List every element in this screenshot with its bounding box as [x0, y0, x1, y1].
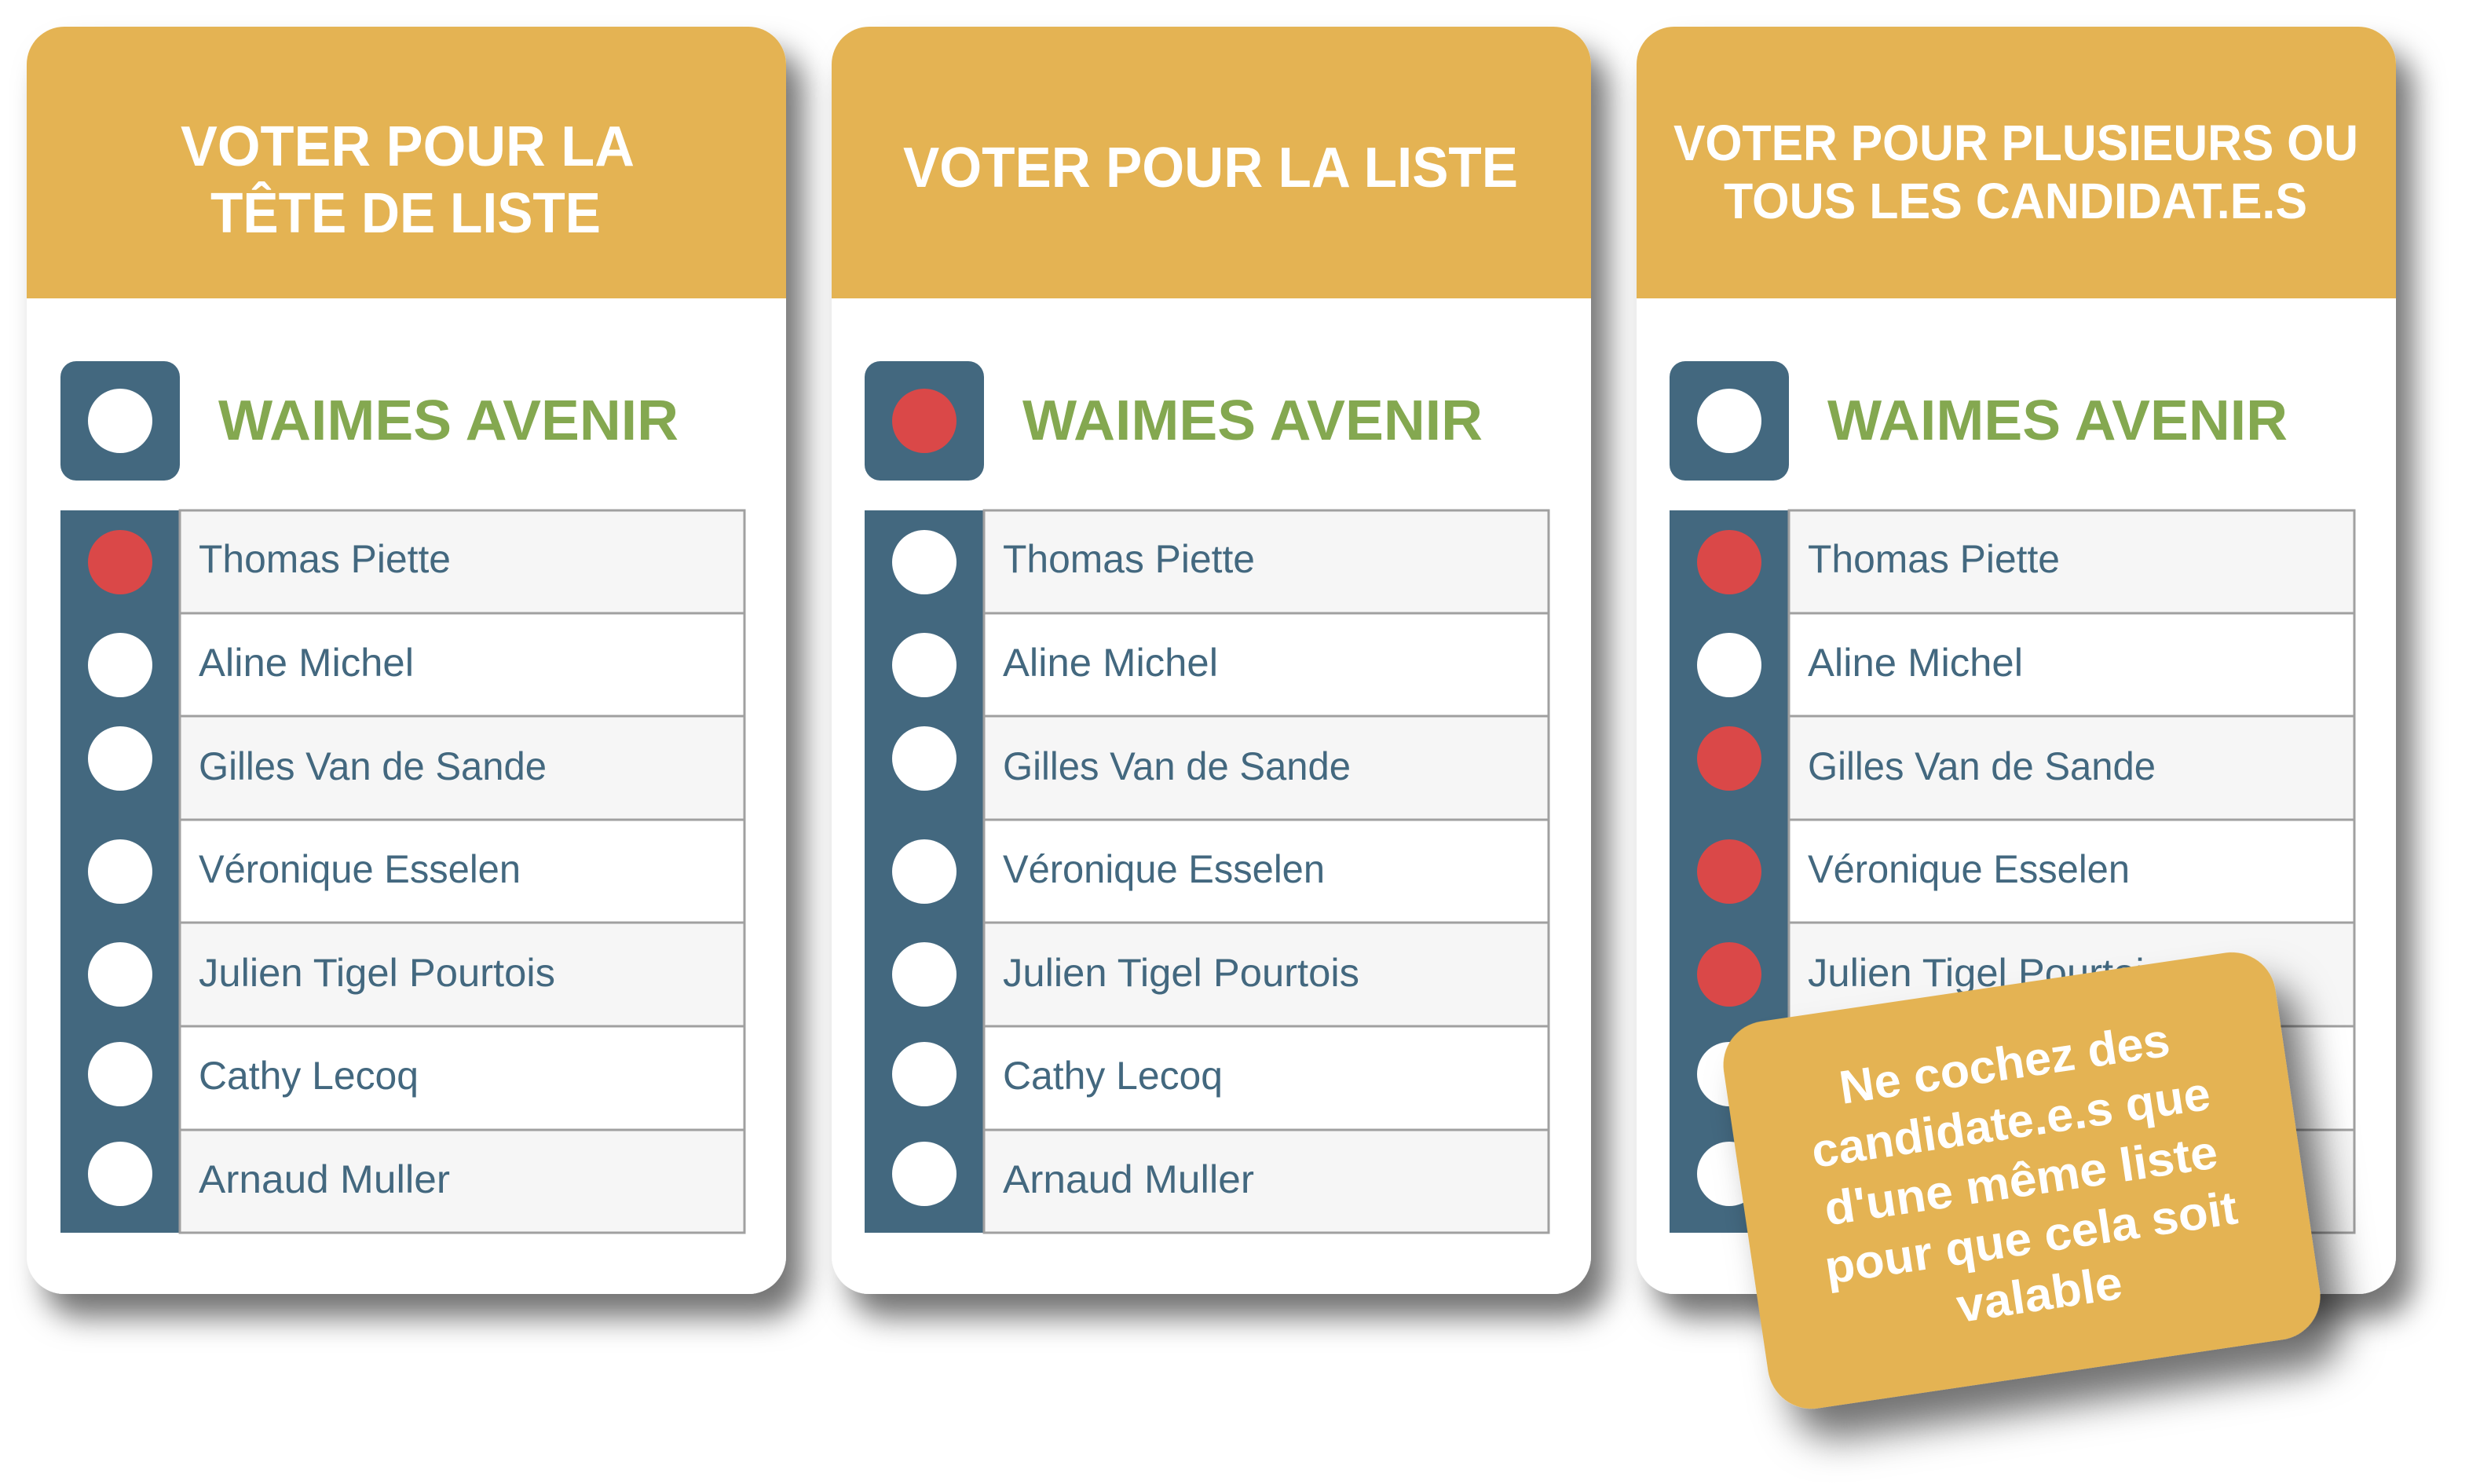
- heading: [181, 115, 635, 245]
- callout text: [1795, 1007, 2249, 1351]
- candidate table: Cathy Lecoq: [1003, 1054, 1223, 1098]
- candidate table: Aline Michel: [1808, 641, 2023, 685]
- list checkbox: [60, 361, 180, 481]
- list name: WAIMES AVENIR: [218, 389, 679, 452]
- heading: VOTER POUR LA LISTE: [903, 137, 1518, 199]
- heading: TÊTE DE LISTE: [210, 181, 601, 245]
- heading: [1673, 115, 2358, 229]
- list checkbox: [1670, 361, 1789, 481]
- callout text: candidate.e.s que: [1808, 1067, 2214, 1178]
- candidate table: Thomas Piette: [1808, 537, 2060, 581]
- candidate table: [865, 510, 1549, 1233]
- list name: WAIMES AVENIR: [1827, 389, 2288, 452]
- list checkbox: [865, 361, 984, 481]
- callout text: valable: [1953, 1256, 2126, 1332]
- candidate table: Arnaud Muller: [1808, 1157, 2059, 1201]
- candidate table: Arnaud Muller: [199, 1157, 450, 1201]
- callout text: Ne cochez des: [1836, 1014, 2173, 1114]
- candidate table: Arnaud Muller: [1003, 1157, 1254, 1201]
- candidate table: [60, 510, 744, 1233]
- heading: VOTER POUR PLUSIEURS OU: [1673, 115, 2358, 171]
- candidate table: Thomas Piette: [1003, 537, 1255, 581]
- card header: [27, 27, 786, 298]
- card background: [27, 27, 786, 1294]
- panel: vote for head of list: [27, 27, 786, 1294]
- candidate table: Aline Michel: [199, 641, 414, 685]
- card header: [832, 27, 1591, 298]
- card background: [832, 27, 1591, 1294]
- candidate table: Véronique Esselen: [1003, 847, 1325, 891]
- list name: WAIMES AVENIR: [1022, 389, 1483, 452]
- candidate table: Cathy Lecoq: [1808, 1054, 2028, 1098]
- candidate table: Véronique Esselen: [199, 847, 521, 891]
- candidate table: Gilles Van de Sande: [199, 744, 547, 788]
- candidate table: Aline Michel: [1003, 641, 1218, 685]
- card header: [1637, 27, 2396, 298]
- card background: [1637, 27, 2396, 1294]
- candidate table: Julien Tigel Pourtois: [1808, 951, 2164, 995]
- candidate table: Cathy Lecoq: [199, 1054, 419, 1098]
- callout text: pour que cela soit: [1821, 1181, 2240, 1294]
- candidate table: Véronique Esselen: [1808, 847, 2130, 891]
- candidate table: [1670, 510, 2354, 1233]
- heading: TOUS LES CANDIDAT.E.S: [1724, 173, 2307, 229]
- callout: tilted note: [1717, 946, 2326, 1415]
- candidate table: Thomas Piette: [199, 537, 451, 581]
- candidate table: Julien Tigel Pourtois: [1003, 951, 1359, 995]
- panel: vote for the list: [832, 27, 1591, 1294]
- candidate table: Gilles Van de Sande: [1003, 744, 1351, 788]
- callout text: d'une même liste: [1821, 1125, 2221, 1235]
- panel: vote for several or all candidates: [1637, 27, 2396, 1294]
- candidate table: Julien Tigel Pourtois: [199, 951, 555, 995]
- candidate table: Gilles Van de Sande: [1808, 744, 2156, 788]
- heading: VOTER POUR LA: [181, 115, 635, 178]
- callout background: [1717, 946, 2326, 1415]
